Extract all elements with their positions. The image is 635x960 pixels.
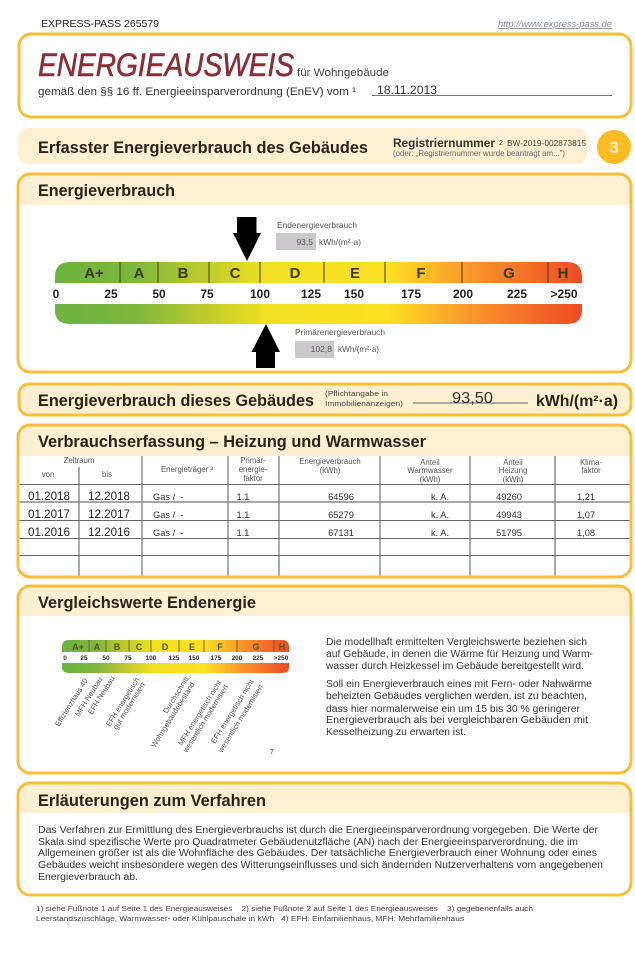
panel: explanation of procedure [18,783,631,895]
energy class scale: H [558,265,568,282]
comparison explanation text: Kesselheizung zu erwarten ist. [326,727,466,738]
comparison explanation text: Energieverbrauch als bei vergleichbaren Gebäuden mit [326,715,588,726]
comparison explanation text: auf Gebäude, in denen die Wärme für Heizung und Warm- [326,649,593,660]
table row 2018: 01.2018 [28,489,70,503]
small energy class scale: 25 [80,655,88,662]
table row 2017 [28,507,595,521]
small energy class scale: D [162,642,169,652]
final energy value: kWh/(m²·a) [319,237,361,247]
table row 2017: 1.1 [237,510,249,520]
table header: (kWh) [503,475,524,484]
panel heading: Erläuterungen zum Verfahren [38,792,266,810]
table row 2016: 67131 [328,528,354,538]
small energy class scale: 150 [189,655,200,662]
consumption heading: Energieverbrauch dieses Gebäudes [38,392,314,410]
table row 2018: 49260 [496,492,522,502]
energy class scale: A [134,265,145,282]
small energy class scale: 100 [146,655,157,662]
table row 2016 [28,525,595,539]
table header: Klima- [580,458,602,467]
title: ENERGIEAUSWEIS [38,47,294,83]
comparison explanation text [325,637,593,738]
table row 2016: 51795 [496,528,522,538]
table row 2017: 12.2017 [88,507,130,521]
comparison explanation text: beheizten Gebäudes verglichen werden, ist zu beachten, [326,691,587,702]
table header: Anteil [420,458,440,467]
small energy class scale: H [279,642,285,652]
mandatory note: Immobilienanzeigen) [325,399,404,408]
table row 2016: 1.1 [237,528,249,538]
panel: comparison values [18,586,631,773]
panel heading: Energieverbrauch [38,182,175,200]
table row 2017: 01.2017 [28,507,70,521]
rotated building type labels: gut modernisiert [111,680,148,731]
table header: Warmwasser [407,466,453,475]
footnotes: 1) siehe Fußnote 1 auf Seite 1 des Energieausweises 2) siehe Fußnote 2 auf Seite 1 des Energieausweises 3) gegebenenfalls auch [36,904,533,913]
table header: von [42,470,54,479]
table row 2017: k. A. [431,510,449,520]
procedure text: Energieverbrauch ab. [38,872,138,883]
table header: Primär- [240,456,266,465]
page number badge: 3 [609,138,619,157]
table row 2016: 12.2016 [88,525,130,539]
comparison explanation text: dass hier normalerweise ein um 15 bis 30 % geringerer [326,704,581,715]
table row 2018: 64596 [328,492,354,502]
table row 2018: Gas / - [153,492,183,502]
primary energy value: kWh/(m²·a) [338,344,379,354]
footnote marker: 7 [270,749,274,756]
small energy class scale: G [252,642,260,652]
table row 2016: 1,08 [577,528,595,538]
rotated building type labels: MFH energetisch nicht [176,678,224,747]
energy class scale: 50 [152,287,166,301]
rotated building type labels: Effizienzhaus 40 [53,677,90,728]
procedure text: Skala sind spezifische Werte pro Quadratmeter Gebäudenutzfläche (AN) nach der Energieeinsparverordnung, die im [38,837,578,848]
table header [42,456,602,484]
arrow: final energy marker [233,217,261,261]
panel: consumption record [18,425,631,577]
issue date: 18.11.2013 [377,85,437,97]
page number badge [597,130,631,164]
energy class scale [53,262,582,324]
small energy class scale: 75 [124,655,132,662]
energy class scale: E [350,265,360,282]
energy class scale: A+ [84,265,104,282]
final energy value: Endenergieverbrauch [277,220,357,230]
table row 2018: 1,21 [577,492,595,502]
table grid [18,456,631,577]
section banner [18,128,631,164]
comparison explanation text: Die modellhaft ermittelten Vergleichswerte beziehen sich [326,637,587,648]
panel heading: Verbrauchserfassung – Heizung und Warmwasser [38,433,427,451]
registration number: Registriernummer [393,138,496,150]
energy class scale: 25 [104,287,118,301]
small energy class scale: >250 [274,655,289,662]
table row 2018: k. A. [431,492,449,502]
small energy class scale: 200 [232,655,243,662]
energy class scale: 175 [401,287,421,301]
subtitle: für Wohngebäude [297,67,389,79]
footnotes: Leerstandszuschläge, Warmwasser- oder Kühlpauschale in kWh 4) EFH: Einfamilienhaus, MFH: Mehrfamilienhaus [36,914,464,923]
arrow: primary energy marker [252,324,280,368]
panel heading: Vergleichswerte Endenergie [38,594,256,612]
rotated building type labels: Durchschnitt [161,674,191,715]
consumption unit: kWh/(m²·a) [536,393,618,410]
energy class scale: C [230,265,241,282]
energy class scale: >250 [550,287,578,301]
table row 2018: 1.1 [237,492,249,502]
table row 2016: 01.2016 [28,525,70,539]
small energy class scale: E [189,642,195,652]
table row 2017: Gas / - [153,510,183,520]
table row 2016: k. A. [431,528,449,538]
table header: faktor [581,466,601,475]
small energy class scale: F [217,642,223,652]
table row 2016: Gas / - [153,528,183,538]
energy class scale: 100 [250,287,270,301]
final energy value: 93,5 [296,237,313,247]
table header: faktor [243,474,263,483]
procedure text: Das Verfahren zur Ermittlung des Energieverbrauchs ist durch die Energieeinsparverordnung vorgegeben. Die Werte der [38,825,599,836]
energy class scale: G [503,265,515,282]
primary energy value [295,327,385,358]
panel: consumption of this building [19,384,631,415]
registration number: 2 [499,140,503,147]
table header: Heizung [499,466,527,475]
rotated building type labels: MFH Neubau [73,675,104,718]
page reference header: EXPRESS-PASS 265579 [41,18,159,30]
table header: Zeitraum [64,456,94,465]
consumption value [413,390,528,407]
mandatory note [325,389,404,408]
energy class scale: 225 [507,287,527,301]
small energy class scale [62,640,289,673]
small energy class scale: 0 [63,655,67,662]
rotated building type labels: EFH energetisch nicht [209,677,256,745]
table row 2018 [28,489,595,503]
table header: bis [102,470,112,479]
registration number: BW-2019-002873815 [507,139,587,148]
procedure text: Gebäudes weicht insbesondere wegen des Witterungseinflusses und sich ändernden Nutzerverhaltens vom angegebenen [38,860,603,871]
energy class scale: 0 [53,287,60,301]
panel: Energieverbrauch [18,174,631,372]
table header: Energieträger ³ [161,465,213,474]
primary energy value: Primärenergieverbrauch [295,327,385,337]
energy class scale: 75 [200,287,214,301]
comparison explanation text: wasser durch Heizkessel im Gebäude bereitgestellt wird. [325,661,584,672]
small energy class scale: 125 [169,655,180,662]
energy class scale: D [290,265,301,282]
section heading: Erfasster Energieverbrauch des Gebäudes [38,139,368,157]
comparison explanation text: Soll ein Energieverbrauch eines mit Fern- oder Nahwärme [326,679,593,690]
energy class scale: 150 [344,287,364,301]
energy class scale: 200 [453,287,473,301]
rotated building type labels: wesentlich modernisiert [181,682,231,755]
small energy class scale: 225 [253,655,264,662]
table header: (kWh) [320,466,341,475]
small energy class scale: 50 [102,655,110,662]
table header: (kWh) [420,475,441,484]
rotated building type labels: EFH Neubau [86,675,117,716]
rotated building type labels: wesentlich modernisiert [216,682,266,755]
table header: energie- [239,465,268,474]
procedure text: Allgemeinen größer ist als die Wohnfläche des Gebäudes. Der tatsächliche Energieverbrauch einer Wohnung oder eines [38,848,597,859]
table header: Energieverbrauch [299,457,361,466]
energy class scale: 125 [301,287,321,301]
energy class scale: F [416,265,426,282]
small energy class scale: C [136,642,143,652]
registration number: (oder: „Registriernummer wurde beantragt am...") [393,149,565,158]
small energy class scale: B [114,642,121,652]
table header: Anteil [503,458,523,467]
rotated building type labels [53,674,266,755]
consumption value: 93,50 [452,390,493,407]
small energy class scale: 175 [211,655,222,662]
registration number [393,138,587,158]
legal basis line: gemäß den §§ 16 ff. Energieeinsparverordnung (EnEV) vom ¹ [38,86,356,98]
page reference header [41,18,612,30]
table row 2018: 12.2018 [88,489,130,503]
rotated building type labels: EFH energetisch [104,676,141,728]
small energy class scale: A+ [72,642,84,652]
procedure text [38,825,603,883]
panel: title [19,34,631,117]
final energy value [276,220,361,250]
energy class scale: B [178,265,189,282]
table row 2017: 49943 [496,510,522,520]
primary energy value: 102,8 [311,344,332,354]
table row 2017: 65279 [328,510,354,520]
table row 2017: 1,07 [577,510,595,520]
rotated building type labels: Wohngebäudebestand [149,680,197,749]
small energy class scale: A [94,642,101,652]
footnotes [36,904,533,923]
mandatory note: (Pflichtangabe in [325,389,388,398]
page reference header: http://www.express-pass.de [498,19,612,30]
